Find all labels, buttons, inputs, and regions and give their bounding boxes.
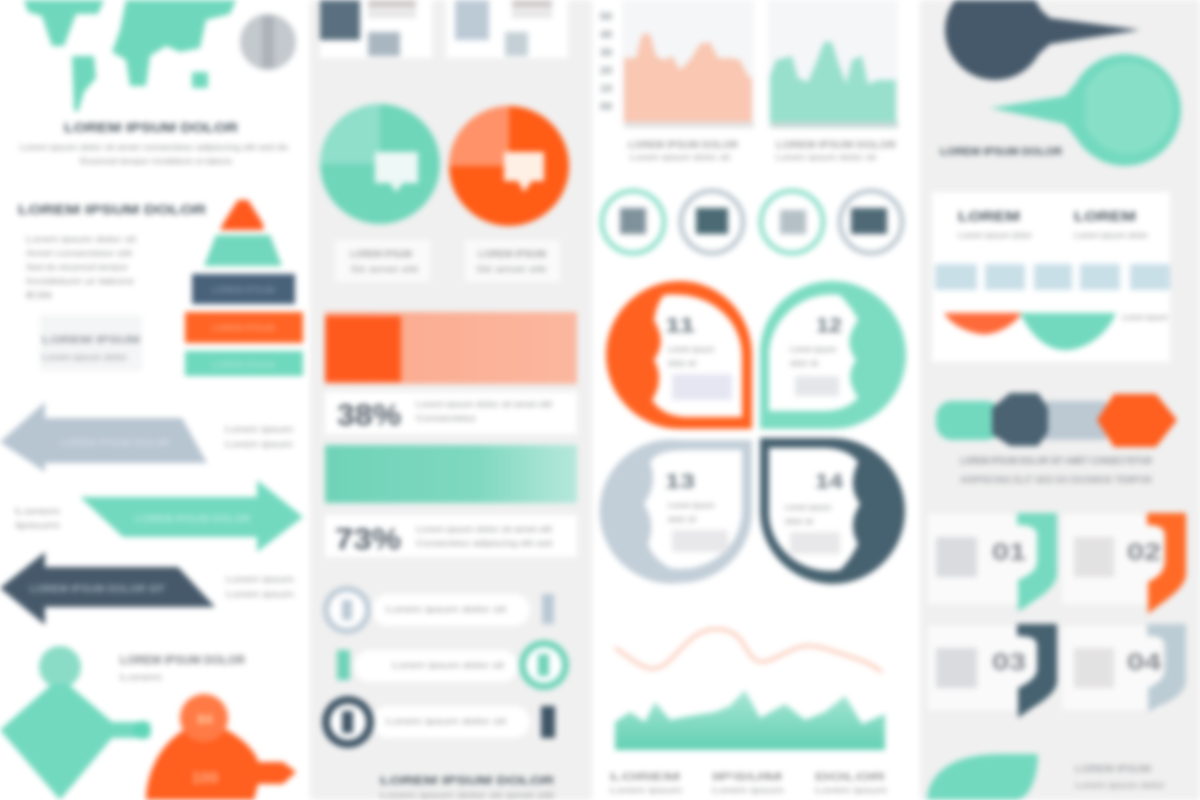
pyramid layers	[185, 200, 303, 376]
teal chart caption: Lorem ipsum dolor sit	[776, 153, 877, 162]
small card two	[446, 0, 568, 58]
petal 04 dark	[760, 438, 905, 584]
stat 73 percent	[325, 515, 577, 557]
panel: top cards column two	[320, 0, 568, 58]
teal blob	[927, 754, 1038, 800]
pyramid layers: LOREM IPSUM	[211, 360, 275, 370]
orange chart caption: LOREM IPSUM DOLOR	[628, 140, 739, 151]
chart: teal area	[770, 42, 896, 122]
panel: toggle list	[322, 586, 569, 800]
arrow: teal right: Ipsum	[15, 521, 61, 530]
bubble dark	[945, 0, 1140, 80]
column two heading	[1074, 208, 1148, 240]
chart axis labels: 00	[600, 101, 612, 113]
orange chart caption	[628, 140, 739, 162]
ring teal two	[761, 191, 823, 253]
arrow: grey left: LOREM IPSUM DOLOR	[60, 438, 170, 449]
chain caption	[960, 456, 1153, 486]
small card one	[320, 0, 432, 58]
ring teal one	[602, 191, 664, 253]
teal chart caption: LOREM IPSUM DOLOR	[776, 140, 897, 151]
chart captions: LOREM	[610, 772, 680, 783]
panel: line and area chart	[610, 629, 888, 795]
footer note: LOREM IPSUM DOLOR	[380, 775, 554, 787]
panel: process chain	[936, 393, 1177, 486]
map description: Eiusmod tempor incididunt ut labore	[80, 157, 233, 166]
arrow: grey left: Lorem ipsum	[225, 425, 293, 434]
donut caption one	[335, 240, 430, 282]
card 02	[1062, 513, 1186, 614]
card background	[932, 192, 1170, 362]
petal 03 grey: dolor sit	[668, 515, 697, 524]
card 04: 04	[1127, 649, 1162, 676]
value cells	[935, 264, 1170, 290]
orange blob pin: 84	[197, 711, 213, 727]
petal 03 grey: 13	[665, 471, 695, 493]
petal 03 grey	[600, 440, 752, 584]
bubble caption: LOREM IPSUM DOLOR	[940, 146, 1062, 158]
pyramid description: Lorem ipsum dolor sit	[26, 235, 137, 244]
panel: data card	[932, 192, 1170, 362]
arrow: teal right: LOREM IPSUM DOLOR	[135, 514, 251, 525]
chart axis labels: 40	[600, 29, 612, 41]
orange progress bar	[325, 312, 577, 384]
pins heading: Lorem	[120, 673, 163, 682]
petal 02 teal: Lorem ipsum	[790, 345, 837, 354]
chart axis labels: 30	[600, 47, 612, 59]
footer card: LOREM IPSUM	[1075, 764, 1151, 775]
toggle row one: Lorem ipsum dolor sit	[386, 605, 507, 614]
button	[40, 315, 142, 371]
arrow: dark left: Lorem ipsum	[226, 575, 294, 584]
donut caption two: LOREM IPSUM	[478, 249, 546, 259]
petal 04 dark: 14	[815, 471, 844, 493]
button: Lorem ipsum dolor	[42, 353, 127, 362]
chain teal	[936, 401, 1002, 440]
toggle row two	[337, 640, 569, 690]
footer card	[1075, 764, 1165, 790]
pyramid layers: LOREM IPSUM	[211, 323, 275, 333]
chain caption: LOREM IPSUM DOLOR SIT AMET CONSECTETUR	[960, 456, 1153, 467]
chart captions: Lorem ipsum	[815, 786, 888, 795]
ring dark	[840, 191, 902, 253]
petal 02 teal	[760, 281, 906, 429]
bubble teal	[990, 54, 1181, 166]
chart: orange area	[624, 34, 752, 122]
pyramid description: Incididunt ut labore	[26, 277, 135, 286]
panel: donut icons	[320, 104, 569, 282]
pyramid description	[26, 235, 137, 300]
footer note: Lorem ipsum dolor sit amet elit	[380, 791, 555, 800]
arrow: teal right	[15, 480, 303, 552]
chain grey	[1040, 401, 1106, 440]
stat 38 percent	[325, 392, 577, 434]
chart captions: Lorem ipsum	[610, 786, 683, 795]
teal diamond pin	[0, 646, 151, 800]
pyramid description: Amet consectetur elit	[26, 249, 133, 258]
toggle row three: Lorem ipsum dolor sit	[386, 717, 507, 726]
pyramid description: Elit	[26, 291, 54, 300]
panel: speech bubbles	[940, 0, 1181, 166]
chart: teal area	[615, 690, 885, 750]
stat 38 percent: Lorem ipsum dolor sit amet elit	[416, 400, 553, 409]
petal 01 orange: Lorem ipsum	[668, 345, 715, 354]
orange chart caption: Lorem ipsum dolor sit	[630, 153, 731, 162]
panel: numbered cards	[928, 513, 1186, 718]
ring grey	[681, 191, 743, 253]
card 01: 01	[992, 539, 1026, 566]
panel: progress bars	[325, 312, 577, 557]
half ellipse orange	[944, 313, 1022, 334]
icon: globe	[240, 14, 296, 70]
toggle row three	[322, 696, 555, 748]
teal progress bar	[325, 445, 577, 503]
petal 04 dark: dolor sit	[785, 517, 814, 526]
card 02: 02	[1127, 539, 1161, 566]
chart axis labels: 10	[600, 83, 612, 95]
stat 73 percent: 73%	[335, 523, 401, 556]
petal 04 dark: Lorem ipsum	[785, 503, 832, 512]
map description: Lorem ipsum dolor sit amet consectetur adipiscing elit sed do	[20, 143, 289, 152]
orange blob pin: 100	[192, 770, 218, 787]
petal 02 teal: 12	[816, 315, 842, 337]
chart axis labels	[600, 11, 612, 113]
pins heading	[120, 653, 245, 682]
stat 38 percent: 38%	[337, 399, 401, 432]
donut caption two: Sit amet elit	[476, 265, 547, 274]
card 04	[1062, 624, 1186, 712]
pyramid layers: LOREM IPSUM	[211, 285, 275, 295]
footer card: Lorem ipsum dolor	[1075, 781, 1165, 790]
chart captions: Lorem ipsum	[712, 786, 785, 795]
petal 01 orange: dolor sit	[668, 359, 697, 368]
donut orange	[449, 106, 569, 226]
map description	[20, 143, 289, 166]
pins heading: LOREM IPSUM DOLOR	[120, 653, 245, 667]
column one heading: LOREM	[958, 208, 1020, 224]
chain dark	[992, 393, 1048, 446]
panel: footer shapes	[927, 754, 1165, 800]
donut teal	[320, 104, 440, 224]
arrow: grey left: Lorem ipsum	[225, 440, 293, 449]
pyramid description: Sed do eiusmod tempor	[26, 263, 128, 272]
column two heading: LOREM	[1074, 208, 1136, 224]
card 03	[928, 624, 1057, 718]
column one heading: Lorem ipsum dolor	[958, 231, 1032, 240]
stat 73 percent: Lorem ipsum dolor sit amet elit	[416, 525, 553, 534]
chart: orange line	[615, 629, 882, 672]
donut caption one: Sit amet elit	[350, 265, 419, 274]
chart captions: DOLOR	[815, 772, 887, 783]
panel: area charts	[600, 0, 898, 162]
panel: arrows	[0, 402, 303, 625]
card 01	[928, 513, 1057, 612]
stat 38 percent: Consectetur	[416, 414, 476, 423]
pyramid heading: LOREM IPSUM DOLOR	[18, 202, 207, 217]
map heading: LOREM IPSUM DOLOR	[64, 120, 239, 135]
half ellipse teal	[1020, 313, 1116, 350]
toggle row one	[323, 586, 554, 634]
chain caption: ADIPISCING ELIT SED DO EIUSMOD TEMPOR	[960, 475, 1153, 486]
chain orange	[1097, 394, 1177, 447]
chart captions: IPSUM	[712, 772, 782, 783]
petal 01 orange	[606, 281, 752, 429]
donut caption two	[465, 240, 560, 282]
arrow: grey left	[0, 402, 293, 472]
chart axis labels: 50	[600, 11, 612, 23]
chart axis labels: 20	[600, 65, 612, 77]
trailing label: Lorem ipsum	[1122, 313, 1168, 322]
chart backdrop	[622, 0, 898, 128]
arrow: dark left	[0, 552, 294, 625]
panel: icon rings	[602, 191, 902, 253]
teal chart caption	[776, 140, 897, 162]
panel: pyramid	[18, 200, 303, 376]
petal 03 grey: Lorem ipsum	[668, 501, 715, 510]
stat 73 percent: Consectetur adipiscing elit sed	[416, 539, 552, 548]
donut caption one: LOREM IPSUM	[350, 249, 412, 259]
column two heading: Lorem ipsum dolor	[1074, 231, 1148, 240]
panel: four petals	[600, 281, 906, 584]
column one heading	[958, 208, 1032, 240]
panel: world map	[20, 0, 296, 166]
card 03: 03	[992, 649, 1026, 676]
panel: location pins	[0, 646, 296, 800]
arrow: dark left: Lorem ipsum	[226, 590, 294, 599]
chart captions	[610, 772, 888, 795]
orange blob pin	[146, 694, 296, 800]
arrow: dark left: LOREM IPSUM DOLOR SIT	[30, 584, 165, 595]
footer note	[380, 775, 555, 800]
arrow: teal right: Lorem	[15, 507, 61, 516]
map continents	[24, 0, 236, 112]
toggle row two: Lorem ipsum dolor sit	[392, 661, 505, 670]
petal 01 orange: 11	[665, 315, 695, 337]
button: LOREM IPSUM	[42, 335, 140, 346]
petal 02 teal: dolor sit	[790, 359, 819, 368]
